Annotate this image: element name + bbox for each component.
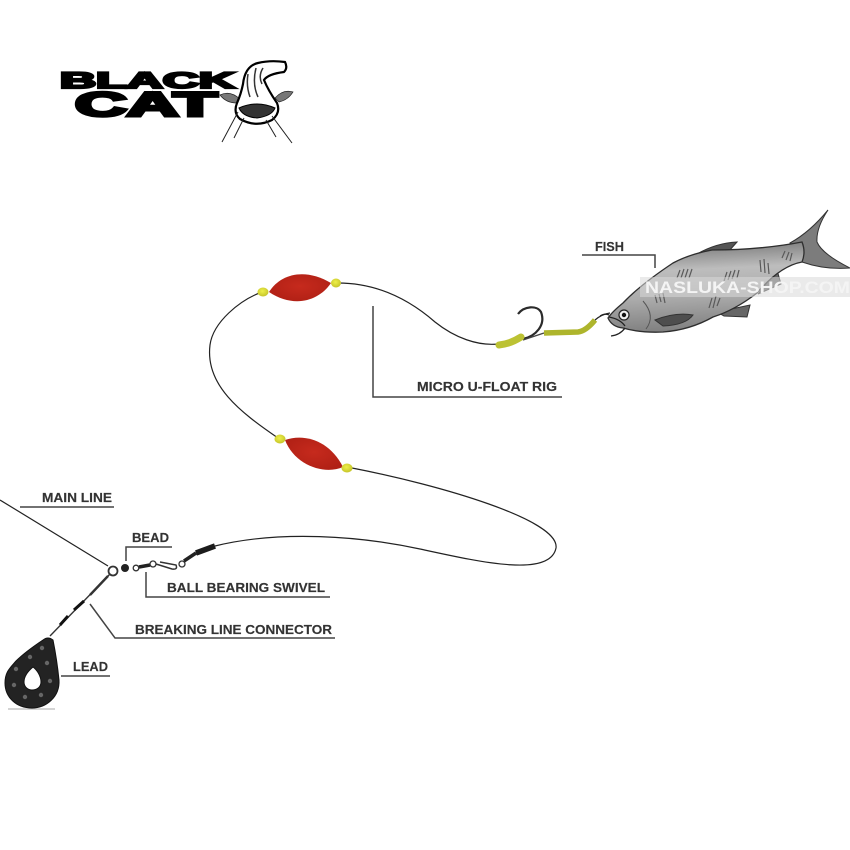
fish gill bbox=[643, 301, 650, 329]
fish scales bbox=[655, 251, 792, 308]
tail fin bbox=[790, 210, 850, 268]
ball bearing swivel bbox=[133, 553, 196, 571]
label: ball bearing swivel: BALL BEARING SWIVEL bbox=[167, 580, 325, 595]
label: bead: BEAD bbox=[132, 530, 169, 545]
breaking line connector bbox=[50, 574, 110, 636]
label: micro u-float rig bbox=[373, 306, 562, 397]
fish eye bbox=[619, 310, 629, 320]
dorsal fin bbox=[697, 242, 737, 254]
logo wordmark: BLACK bbox=[60, 68, 235, 93]
ventral fin bbox=[717, 305, 750, 317]
label: micro u-float rig: MICRO U-FLOAT RIG bbox=[417, 379, 557, 394]
label: fish bbox=[582, 239, 655, 268]
logo catfish icon bbox=[220, 61, 293, 143]
ring and bead bbox=[108, 564, 129, 576]
float: upper red float with beads bbox=[258, 274, 341, 301]
hook with sleeves bbox=[499, 307, 610, 345]
label: breaking line connector bbox=[90, 604, 335, 638]
fish mouth and barbel bbox=[600, 314, 625, 336]
fish bbox=[600, 210, 850, 336]
ground shadow under lead bbox=[8, 708, 55, 710]
main line bbox=[0, 500, 108, 566]
label: main line bbox=[20, 490, 114, 507]
lead weight bbox=[5, 638, 59, 708]
logo wordmark bbox=[60, 68, 235, 124]
line stopper sleeve bbox=[196, 546, 215, 553]
anal fin bbox=[758, 270, 781, 294]
label: lead: LEAD bbox=[73, 659, 108, 674]
fish body bbox=[608, 242, 804, 332]
pectoral fin bbox=[655, 314, 693, 326]
rig line: leader loop to lower float bbox=[215, 468, 556, 565]
label: ball bearing swivel bbox=[146, 572, 330, 597]
logo: Black Cat bbox=[60, 61, 293, 143]
label: main line: MAIN LINE bbox=[42, 490, 112, 505]
label: bead bbox=[126, 530, 172, 561]
float: lower red float with beads bbox=[274, 434, 352, 472]
logo wordmark: CAT bbox=[75, 86, 217, 124]
label: lead bbox=[61, 659, 110, 676]
rig line: between floats bbox=[210, 292, 278, 438]
rig line: upper float to hook bbox=[338, 283, 498, 344]
label: fish: FISH bbox=[595, 239, 624, 254]
label: breaking line connector: BREAKING LINE CONNECTOR bbox=[135, 622, 333, 637]
watermark: NASLUKA-SHOP.COM bbox=[645, 278, 850, 297]
